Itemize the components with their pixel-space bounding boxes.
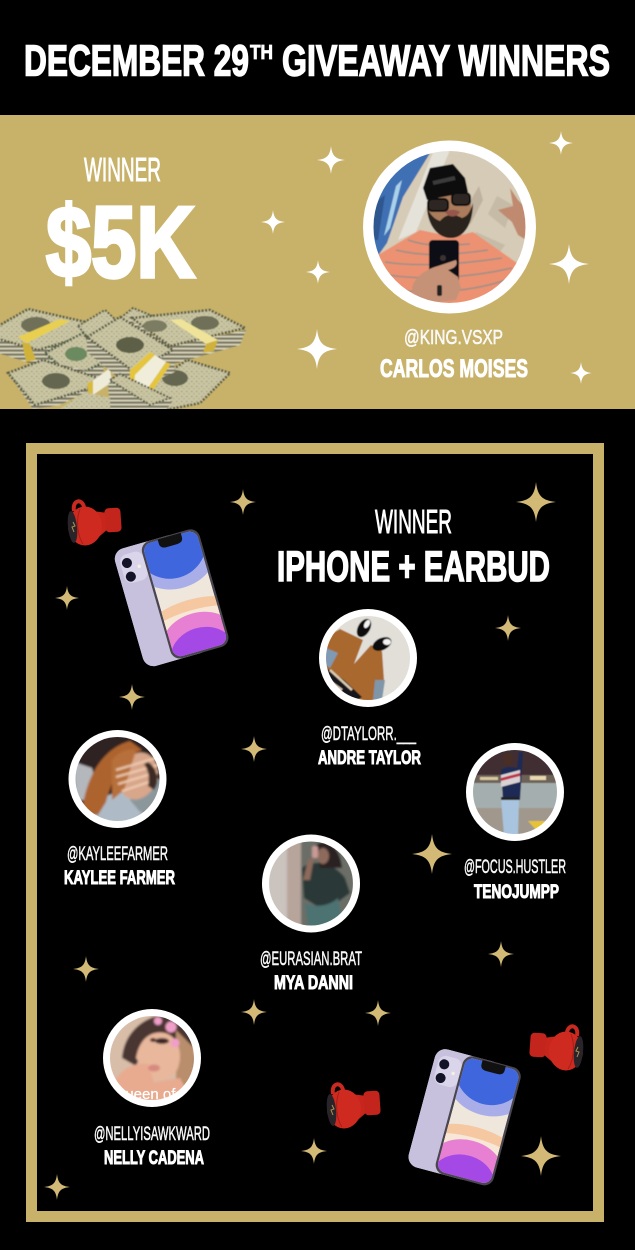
panel: iPhone and earbud winners frame [32,448,598,1216]
winner: Nelly Cadena [94,1009,210,1169]
avatar: Kaylee Farmer [68,730,166,828]
title [24,36,610,86]
heading: winner: WINNER [375,503,452,540]
icon: iPhone bottom right [398,1021,541,1219]
photo caption: queen of: queen of [117,1086,176,1103]
icon: earbud bottom centre [325,1084,381,1128]
winner: Mya Danni [260,834,362,994]
icon: earbud bottom right [529,1026,585,1070]
handle: @kayleefarmer: @KAYLEEFARMER [67,844,168,865]
panel: grand prize winner [0,115,635,412]
name: Tenojumpp: TENOJUMPP [474,882,559,903]
name: Nelly Cadena: NELLY CADENA [104,1148,204,1169]
title: TH [250,42,273,64]
winner: Tenojumpp [464,743,566,903]
handle: @eurasian.brat: @EURASIAN.BRAT [260,949,362,970]
avatar: Nelly Cadena [103,1009,201,1107]
title: DECEMBER 29 [24,36,249,86]
icon: iPhone top left [105,499,250,697]
name: Kaylee Farmer: KAYLEE FARMER [64,868,175,889]
winner name: CARLOS MOISES [380,355,528,383]
avatar: Carlos Moises [363,140,536,314]
handle: @dtaylorr.___: @DTAYLORR.___ [321,724,416,745]
prize label: winner: WINNER [84,151,161,188]
name: Andre Taylor: ANDRE TAYLOR [318,748,421,769]
sparkles: white [261,131,592,384]
handle: @nellyisawkward: @NELLYISAWKWARD [94,1124,210,1145]
illustration: money stacks [0,308,246,412]
avatar: Andre Taylor [319,609,417,707]
icon: earbud top left [66,501,122,546]
prize amount: $5K [46,187,195,299]
name: Mya Danni: MYA DANNI [274,973,353,994]
winner handle: @KING.VSXP [404,327,503,349]
avatar: Mya Danni [262,834,360,932]
winner: Andre Taylor [318,609,421,769]
sparkles: gold [44,482,561,1200]
avatar: Tenojumpp [466,743,564,841]
winner: Kaylee Farmer [64,730,175,889]
